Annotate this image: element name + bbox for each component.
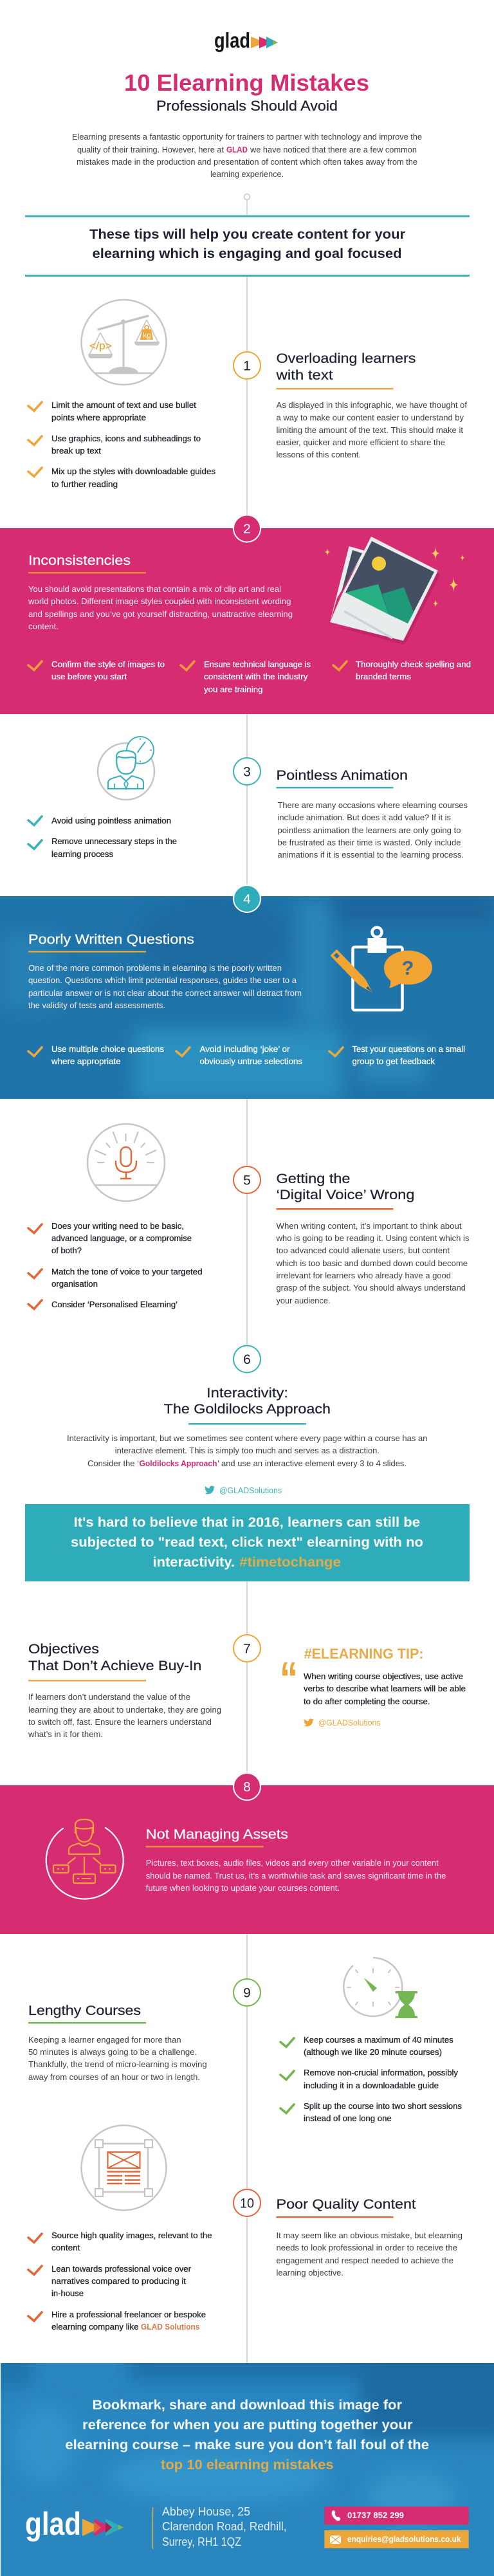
bullets: overloading tips: Mix up the styles with downloadable guides [51, 466, 216, 476]
number badge 8 [233, 1773, 261, 1800]
closing message [65, 2397, 429, 2472]
number badge 9 [233, 1979, 261, 2006]
bullets: overloading tips [28, 400, 216, 489]
panel: 3 pointless animation [28, 737, 468, 860]
bullets: quality tips: in-house [51, 2288, 84, 2298]
title: 10 Elearning Mistakes [124, 69, 369, 96]
bullets: questions tips: Use multiple choice questions [51, 1044, 165, 1054]
bullets: inconsistencies tips: Ensure technical language is [204, 659, 311, 669]
bullets: quality tips: content [51, 2243, 80, 2252]
body text: digital voice: too advanced could alienate users, but content [277, 1246, 450, 1255]
bullets: inconsistencies tips: use before you start [51, 672, 127, 681]
body text: digital voice: irrelevant for learners who already have a good [277, 1271, 451, 1280]
body text: questions: question. Questions which limit potential responses, guides the user to a [28, 975, 297, 985]
body text: questions [28, 963, 302, 1010]
body text: quality: needs to look professional in order to receive the [277, 2243, 457, 2252]
body text: quality: engagement and respect needed to achieve the [277, 2256, 453, 2265]
body text: assets: should be named. Trust us, it’s a worthwhile task and saves significant time in the [146, 1871, 446, 1881]
body text: objectives: to switch off, fast. Ensure the learners understand [28, 1717, 212, 1727]
body text: animation [278, 800, 468, 860]
bullets: overloading tips: break up text [51, 446, 101, 455]
intro text: we have noticed that there are a few common [250, 145, 417, 154]
body text: animation: include animation. But does it add value? If it is [278, 813, 451, 822]
tips banner: elearning which is engaging and goal focused [93, 246, 401, 261]
bullets: quality tips: narratives compared to producing it [51, 2276, 186, 2286]
body text: overloading: easier, quicker and more efficient to share the [277, 437, 445, 447]
icon: person and assets [46, 1819, 124, 1899]
panel: 5 digital voice [28, 1124, 470, 1309]
body text: lengthy courses: Keeping a learner engaged for more than [28, 2035, 181, 2045]
number badge 6 [233, 1346, 261, 1373]
tip: elearning quote: #ELEARNING TIP: [304, 1646, 424, 1662]
body text: animation: be frustrated as their time is wasted. Only include [278, 838, 461, 847]
body text: digital voice [275, 1221, 470, 1305]
panel: footer [0, 2348, 494, 2576]
twitter handle: @GLADSolutions [219, 1486, 282, 1495]
bullets: quality tips: Hire a professional freelancer or bespoke [51, 2310, 206, 2319]
body text: animation: pointless animation the learners are only going to [278, 825, 461, 835]
contact: phone [324, 2507, 469, 2525]
body text: questions: particular answer or is not clear about the correct answer will detract from [28, 988, 302, 998]
body text: overloading: a way to make our content easier to understand by [277, 413, 464, 422]
heading: digital voice [277, 1171, 414, 1210]
bullets: questions tips: group to get feedback [352, 1056, 435, 1066]
tip: elearning quote [280, 1646, 466, 1727]
panel: 9 lengthy courses [28, 1958, 462, 2123]
bullets: lengthy courses tips: Split up the course into two short sessions [304, 2101, 462, 2111]
bullets: quality tips: Source high quality images, relevant to the [51, 2231, 212, 2240]
background photo tint [0, 2348, 494, 2576]
tip: elearning quote: to do after completing the course. [304, 1697, 430, 1706]
bullets: overloading tips: points where appropriate [51, 413, 146, 422]
heading: overloading learners: Overloading learners [277, 351, 416, 366]
panel: 1 overloading learners [28, 300, 467, 489]
body text: inconsistencies [28, 584, 293, 631]
tips banner: These tips will help you create content for your [89, 226, 406, 242]
number badge 7: 7 [243, 1642, 251, 1656]
number badge 2 [233, 515, 261, 542]
bullets: overloading tips: to further reading [51, 479, 118, 489]
number badge 6: 6 [243, 1352, 251, 1367]
heading: digital voice: Getting the [277, 1171, 350, 1186]
body text: overloading [277, 400, 467, 459]
divider and address: Abbey House, 25 [162, 2505, 250, 2518]
bullets: animation tips: Avoid using pointless animation [51, 816, 171, 825]
body text: inconsistencies: world photos. Different image styles coupled with inconsistent wording [28, 596, 291, 606]
bullets: animation tips [28, 816, 177, 859]
bullets: lengthy courses tips: including it in a downloadable guide [304, 2081, 439, 2090]
bullets: inconsistencies tips: Confirm the style of images to [51, 659, 165, 669]
closing message: elearning course – make sure you don’t fall foul of the [65, 2437, 429, 2452]
number badge 3: 3 [243, 764, 251, 780]
body text: overloading: As displayed in this infographic, we have thought of [277, 400, 467, 410]
heading: objectives: Objectives [28, 1641, 99, 1657]
number badge 10: 10 [240, 2196, 254, 2211]
closing message: Bookmark, share and download this image for [93, 2397, 403, 2413]
bullets: lengthy courses tips: Remove non-crucial information, possibly [304, 2068, 458, 2077]
heading: lengthy courses: Lengthy Courses [28, 2003, 141, 2018]
icon: clipboard and pencil [330, 928, 432, 1010]
bullets: lengthy courses tips: Keep courses a maximum of 40 minutes [304, 2035, 453, 2045]
bullets: quality tips [28, 2231, 212, 2332]
bullets: digital voice tips: Consider ‘Personalised Elearning’ [51, 1300, 178, 1309]
body text: lengthy courses: Thankfully, the trend of micro-learning is moving [28, 2059, 207, 2069]
body text: objectives [28, 1692, 221, 1739]
body text: animation: There are many occasions where elearning courses [278, 800, 468, 810]
bullets: questions tips: Test your questions on a small [352, 1044, 465, 1054]
bullets: digital voice tips: organisation [51, 1279, 98, 1289]
number badge 1 [233, 352, 261, 379]
heading: objectives: That Don’t Achieve Buy-In [28, 1658, 201, 1673]
title [124, 69, 369, 114]
callout: hard to believe: subjected to "read text, click next" elearning with no [71, 1534, 423, 1550]
number badge 5: 5 [243, 1173, 251, 1188]
title: Professionals Should Avoid [156, 98, 338, 114]
icon: clipboard and pencil: ? [402, 957, 414, 979]
number badge 10 [233, 2189, 261, 2216]
timeline lines [246, 277, 248, 2363]
icon: page layout [81, 2126, 166, 2211]
bullets: animation tips: Remove unnecessary steps in the [51, 836, 177, 846]
closing message: reference for when you are putting together your [82, 2417, 413, 2433]
body text: lengthy courses: 50 minutes is always going to be a challenge. [28, 2047, 197, 2057]
bullets: questions tips: Avoid including ‘joke’ or [199, 1044, 290, 1054]
bullets: digital voice tips: of both? [51, 1246, 82, 1255]
body text: questions: the validity of tests and assessments. [28, 1000, 165, 1010]
bullets: inconsistencies tips: Thoroughly check spelling and [356, 659, 471, 669]
bullets: digital voice tips: advanced language, or a compromise [51, 1233, 192, 1243]
intro text: mistakes made in the production and presentation of content which often takes away from the [77, 157, 417, 167]
body text: inconsistencies: content. [28, 621, 59, 631]
body text: quality: learning objective. [277, 2268, 343, 2277]
icon: scales: </p> [89, 340, 112, 352]
number badge 7 [233, 1635, 261, 1662]
body text: goldilocks [67, 1433, 427, 1468]
heading: poorly written questions: Poorly Written Questions [28, 932, 194, 947]
logo: glad: glad [214, 28, 250, 52]
body text: quality [277, 2231, 462, 2277]
divider and address: Surrey, RH1 1QZ [162, 2535, 241, 2548]
panel: 2 inconsistencies [0, 515, 494, 714]
tip: elearning quote: @GLADSolutions [318, 1718, 381, 1727]
body text: overloading: lessons of this content. [277, 450, 361, 459]
number badge 8: 8 [243, 1780, 251, 1795]
body text: objectives: learning they are about to undertake, they are going [28, 1705, 221, 1715]
closing message: top 10 elearning mistakes [161, 2457, 334, 2472]
body text: digital voice: which is too basic and dumbed down could become [275, 1258, 468, 1268]
bullets: animation tips: learning process [51, 849, 113, 859]
intro text: quality of their training. However, here at [77, 145, 224, 154]
intro text: GLAD [226, 145, 248, 154]
body text: questions: One of the more common problems in elearning is the poorly written [28, 963, 282, 973]
logo: glad white: glad [25, 2506, 81, 2542]
bullets: digital voice tips: Match the tone of voice to your targeted [51, 1267, 202, 1276]
body text: quality: It may seem like an obvious mistake, but elearning [277, 2231, 462, 2240]
contact: phone: 01737 852 299 [347, 2511, 404, 2520]
intro text: Elearning presents a fantastic opportunity for trainers to partner with technology and improve the [72, 132, 422, 142]
callout: hard to believe: interactivity. [153, 1554, 235, 1570]
intro text: learning experience. [210, 169, 284, 179]
bullets: questions tips: obviously untrue selections [199, 1056, 303, 1066]
bullets: questions tips: where appropriate [51, 1056, 121, 1066]
body text: overloading: limiting the amount of the text. This should make it [277, 425, 463, 435]
tip: elearning quote: When writing course objectives, use active [304, 1671, 463, 1681]
heading: goldilocks [164, 1385, 331, 1424]
heading: objectives [28, 1641, 201, 1682]
heading: pointless animation: Pointless Animation [277, 768, 408, 783]
body text: goldilocks: Interactivity is important, but we sometimes see content where every page within a course has an [67, 1433, 427, 1443]
body text: digital voice: who is going to be reading it. Using content which is [275, 1233, 470, 1243]
icon: scales [81, 300, 166, 385]
bullets: quality tips: elearning company like [51, 2322, 139, 2332]
icon: stopwatch and hourglass [343, 1958, 417, 2018]
icon: person with clock [98, 737, 154, 800]
logo: glad white [25, 2506, 124, 2542]
body text: inconsistencies: You should avoid presentations that contain a mix of clip art and real [28, 584, 281, 594]
body text: objectives: If learners don’t understand the value of the [28, 1692, 190, 1702]
heading: goldilocks: Interactivity: [206, 1385, 288, 1401]
bullets: overloading tips: Use graphics, icons and subheadings to [51, 434, 201, 443]
bullets: digital voice tips [28, 1221, 202, 1309]
body text: digital voice: grasp of the subject. You should always understand [277, 1283, 466, 1293]
bullets: lengthy courses tips: (although we like 20 minute courses) [304, 2047, 442, 2057]
intro text [72, 132, 422, 179]
icon: scales: kg [143, 331, 151, 340]
callout: hard to believe: It's hard to believe that in 2016, learners can still be [74, 1514, 420, 1530]
bullets: inconsistencies tips [28, 659, 471, 694]
bullets: overloading tips: Limit the amount of text and use bullet [51, 400, 196, 410]
panel: 4 poorly written questions [0, 885, 494, 1100]
number badge 4: 4 [243, 892, 251, 907]
bullets: quality tips: GLAD Solutions [141, 2322, 199, 2332]
bullets: digital voice tips: Does your writing need to be basic, [51, 1221, 184, 1231]
bullets: inconsistencies tips: branded terms [356, 672, 412, 681]
body text: assets: Pictures, text boxes, audio files, videos and every other variable in your content [146, 1858, 439, 1868]
body text: goldilocks: ’ and use an interactive element every 3 to 4 slides. [217, 1458, 407, 1468]
callout: hard to believe [25, 1504, 470, 1581]
body text: animation: animations if it is essential to the learning process. [278, 850, 464, 860]
panel: 8 not managing assets [0, 1773, 494, 1934]
body text: objectives: what’s in it for them. [28, 1729, 103, 1739]
body text: inconsistencies: and spellings and you’ve got yourself distracting, unattractive elearning [28, 609, 293, 619]
body text: digital voice: your audience. [277, 1296, 331, 1305]
bullets: inconsistencies tips: you are training [204, 685, 262, 694]
number badge 5 [233, 1166, 261, 1193]
panel: 6 interactivity [25, 1346, 470, 1581]
body text: lengthy courses: away from courses of an hour or two in length. [28, 2072, 200, 2082]
number badge 3 [233, 758, 261, 785]
icon: polaroid photos [324, 537, 465, 645]
bullets: inconsistencies tips: consistent with the industry [204, 672, 308, 681]
body text: digital voice: When writing content, it’s important to think about [277, 1221, 462, 1231]
body text: goldilocks: Consider the ‘ [87, 1458, 139, 1468]
panel: 7 objectives [28, 1635, 466, 1739]
background photo tint [0, 894, 494, 1100]
bullets: questions tips [28, 1044, 465, 1066]
divider and address: Clarendon Road, Redhill, [162, 2520, 287, 2533]
number badge 4 [233, 885, 261, 912]
number badge 9: 9 [243, 1985, 251, 2001]
body text: lengthy courses [28, 2035, 207, 2082]
heading: inconsistencies: Inconsistencies [28, 553, 131, 568]
bullets: lengthy courses tips [280, 2035, 462, 2123]
icon: quote mark: “ [280, 1653, 298, 1705]
logo: glad [214, 28, 278, 52]
timeline start marker [244, 194, 250, 215]
body text: assets: future when looking to update your courses content. [146, 1883, 340, 1893]
contact: email [324, 2530, 469, 2548]
heading: poor quality content: Poor Quality Content [277, 2196, 416, 2212]
divider and address [152, 2505, 287, 2549]
heading: overloading learners [275, 351, 416, 390]
bullets: lengthy courses tips: instead of one long one [304, 2113, 392, 2123]
heading: digital voice: ‘Digital Voice’ Wrong [277, 1187, 414, 1202]
body text: goldilocks: interactive element. This is simply too much and serves as a distraction. [115, 1446, 380, 1455]
tip: elearning quote: verbs to describe what learners will be able [304, 1684, 466, 1693]
callout: hard to believe: #timetochange [239, 1554, 341, 1570]
heading: goldilocks: The Goldilocks Approach [164, 1401, 331, 1417]
number badge 2: 2 [243, 522, 251, 537]
icon: microphone [87, 1124, 165, 1201]
contact: email: enquiries@gladsolutions.co.uk [347, 2535, 461, 2544]
body text: goldilocks: Goldilocks Approach [139, 1458, 217, 1468]
tips banner [25, 215, 470, 277]
body text: assets [146, 1858, 446, 1893]
bullets: quality tips: Lean towards professional voice over [51, 2264, 192, 2274]
number badge 1: 1 [243, 359, 251, 373]
panel: 10 poor quality content [28, 2126, 462, 2332]
heading: not managing assets: Not Managing Assets [146, 1826, 288, 1842]
heading: overloading learners: with text [275, 367, 333, 383]
